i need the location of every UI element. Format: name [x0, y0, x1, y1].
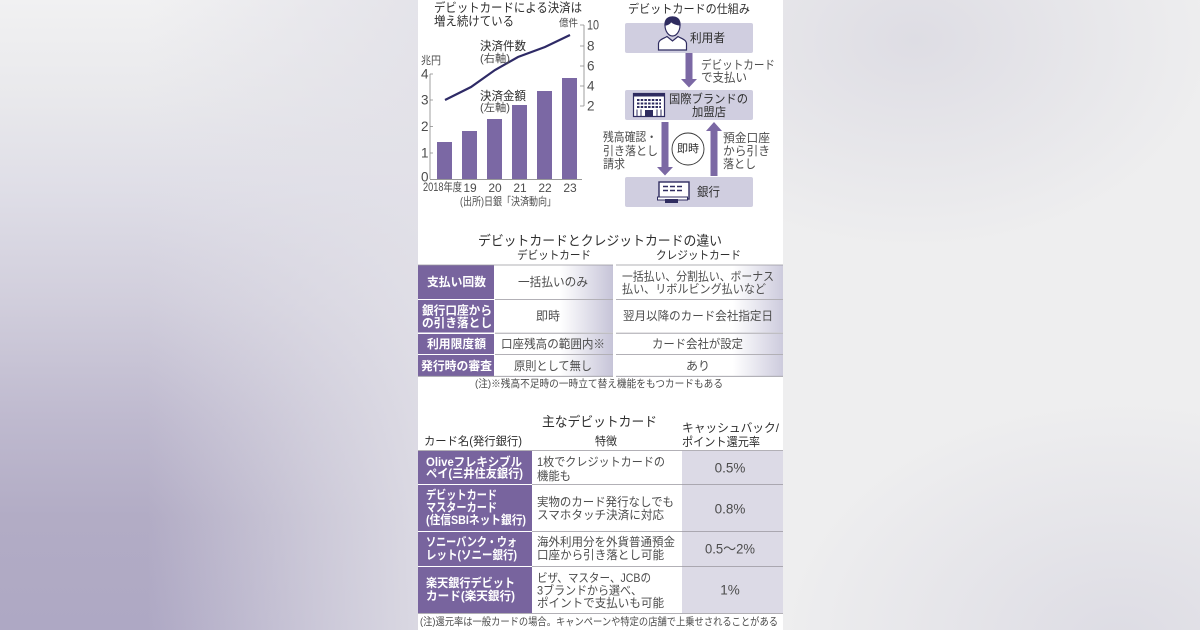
- note: (注)※残高不足時の一時立て替え機能をもつカードもある: [475, 377, 723, 390]
- row: Rakuten: ポイントで支払いも可能: [537, 596, 664, 610]
- left axis: 1: [421, 146, 429, 160]
- row: Master: [418, 485, 745, 531]
- row: Rakuten: 1%: [720, 582, 740, 598]
- row: Master: (住信SBIネット銀行): [426, 512, 526, 527]
- row: Olive: ペイ(三井住友銀行): [426, 466, 523, 480]
- column headings: ポイント還元率: [682, 435, 760, 449]
- arrow: bank to merchant: [706, 122, 722, 176]
- label: pay with debit card: デビットカード: [701, 57, 775, 72]
- row: Rakuten: カード(楽天銀行): [426, 588, 515, 603]
- x axis: 19: [463, 181, 477, 195]
- right axis: 億件: [559, 16, 578, 30]
- row: Sony: レット(ソニー銀行): [426, 547, 517, 562]
- label: amount: [480, 89, 526, 114]
- row: limit: 利用限度額: [427, 336, 487, 351]
- left axis: 2: [421, 119, 429, 134]
- panel: differences between debit and credit: [418, 232, 783, 390]
- left axis: 0: [421, 170, 429, 184]
- row: Sony: [418, 532, 755, 566]
- row: bank withdrawal: [418, 300, 783, 332]
- row: Rakuten: [418, 567, 740, 613]
- left axis: 3: [421, 92, 429, 108]
- icon: bank: [658, 182, 689, 203]
- row: Olive: [418, 451, 745, 484]
- column heading: credit: クレジットカード: [656, 249, 741, 262]
- label: pay with debit card: [701, 57, 775, 84]
- label: amount: (左軸): [480, 100, 510, 114]
- x axis: 21: [513, 181, 527, 195]
- right axis: [559, 16, 599, 114]
- table title: デビットカードとクレジットカードの違い: [478, 232, 722, 248]
- row: number of payments: 一括払いのみ: [518, 274, 588, 289]
- label: balance check: 残高確認・: [603, 129, 657, 144]
- row: Master: 0.8%: [715, 502, 745, 516]
- right axis: 10: [587, 18, 599, 32]
- label: count: 決済件数: [480, 38, 526, 53]
- x axis: 23: [563, 181, 577, 195]
- row: limit: カード会社が設定: [652, 336, 743, 351]
- box: merchant: 加盟店: [692, 105, 726, 119]
- icon: building: [634, 94, 664, 116]
- box: bank: [625, 177, 753, 207]
- box: bank: 銀行: [697, 185, 720, 199]
- x axis: 20: [488, 181, 502, 195]
- badge: immediate: 即時: [677, 142, 699, 155]
- arrow: user to merchant: [681, 53, 697, 88]
- row: Master: 実物のカード発行なしでも: [537, 495, 674, 509]
- chart title: デビットカードによる決済は: [434, 0, 582, 15]
- flow title: デビットカードの仕組み: [628, 2, 750, 16]
- row: number of payments: [418, 265, 783, 299]
- row: Master: デビットカード: [426, 487, 497, 502]
- right axis: 6: [587, 58, 595, 74]
- row: limit: [418, 334, 783, 354]
- row: screening: [418, 355, 783, 376]
- row: Olive: 0.5%: [715, 460, 745, 476]
- row: screening: 発行時の審査: [421, 358, 492, 373]
- white panel: [418, 0, 783, 630]
- column headings: 特徴: [595, 434, 617, 448]
- column headings: [424, 421, 780, 449]
- row: Sony: 海外利用分を外貨普通預金: [537, 534, 675, 549]
- rate column background: [682, 451, 783, 613]
- box: merchant: [625, 90, 753, 120]
- chart title: 増え続けている: [434, 14, 514, 28]
- row: number of payments: 払い、リボルビング払いなど: [622, 282, 766, 296]
- arrow: merchant to bank: [657, 122, 673, 176]
- badge: immediate: [672, 133, 704, 165]
- label: count: [480, 38, 526, 65]
- table title: 主なデビットカード: [542, 414, 657, 430]
- left axis: 4: [421, 66, 429, 82]
- row: bank withdrawal: 翌月以降のカード会社指定日: [623, 308, 773, 323]
- row: Rakuten: 3ブランドから選べ、: [537, 582, 642, 598]
- row: number of payments: 一括払い、分割払い、ボーナス: [622, 268, 774, 284]
- label: withdrawal: [723, 131, 770, 171]
- x axis: [423, 180, 582, 195]
- row: number of payments: 支払い回数: [427, 274, 486, 289]
- line: settlement count: [445, 35, 570, 100]
- panel: how debit cards work: [603, 2, 775, 207]
- row: Olive: Oliveフレキシブル: [426, 454, 522, 469]
- x axis: 2018年度: [423, 180, 462, 194]
- left axis: [421, 54, 441, 184]
- x axis: 22: [538, 181, 552, 195]
- row: Rakuten: 楽天銀行デビット: [426, 575, 515, 590]
- right axis: 4: [587, 78, 595, 94]
- row: Master: スマホタッチ決済に対応: [537, 508, 664, 522]
- panel: debit card payment chart: [421, 0, 599, 208]
- background gradient left: [0, 0, 420, 630]
- row: screening: あり: [686, 359, 710, 373]
- box: user: [625, 17, 753, 53]
- note: (注)還元率は一般カードの場合。キャンペーンや特定の店舗で上乗せされることがある: [420, 615, 778, 628]
- row: Olive: 1枚でクレジットカードの: [537, 454, 665, 469]
- label: withdrawal: 落とし: [723, 157, 756, 171]
- left axis: 兆円: [421, 54, 441, 67]
- row: bank withdrawal: 即時: [536, 309, 560, 323]
- label: amount: 決済金額: [480, 89, 526, 103]
- row: Sony: 口座から引き落とし可能: [537, 548, 664, 562]
- right axis: 8: [587, 38, 595, 54]
- column headings: カード名(発行銀行): [424, 434, 522, 448]
- row: screening: 原則として無し: [514, 358, 592, 373]
- column heading: debit: デビットカード: [517, 248, 591, 262]
- label: withdrawal: 預金口座: [723, 131, 770, 145]
- chart title: [434, 0, 582, 28]
- label: count: (右軸): [480, 51, 510, 65]
- icon: person: [658, 17, 686, 50]
- source: (出所)日銀「決済動向」: [460, 194, 556, 208]
- panel: major debit cards: [418, 414, 783, 628]
- box: user: 利用者: [690, 31, 725, 45]
- row: Sony: ソニーバンク・ウォ: [426, 535, 517, 549]
- row: Sony: 0.5〜2%: [705, 542, 755, 556]
- right axis: 2: [587, 98, 595, 114]
- row: limit: 口座残高の範囲内※: [501, 336, 605, 351]
- label: pay with debit card: で支払い: [701, 70, 747, 84]
- row: Rakuten: ビザ、マスター、JCBの: [537, 571, 651, 585]
- label: balance check: 引き落とし: [603, 144, 658, 158]
- row: bank withdrawal: 銀行口座から: [422, 302, 492, 318]
- row: Master: マスターカード: [426, 500, 497, 514]
- row: Olive: 機能も: [537, 469, 571, 483]
- column headings: キャッシュバック/: [682, 421, 780, 435]
- row: bank withdrawal: の引き落とし: [422, 315, 492, 330]
- box: merchant: 国際ブランドの: [669, 91, 748, 106]
- label: withdrawal: から引き: [723, 144, 770, 158]
- label: balance check: 請求: [603, 157, 625, 171]
- bars: settlement amount: [437, 78, 577, 179]
- label: balance check: [603, 129, 658, 171]
